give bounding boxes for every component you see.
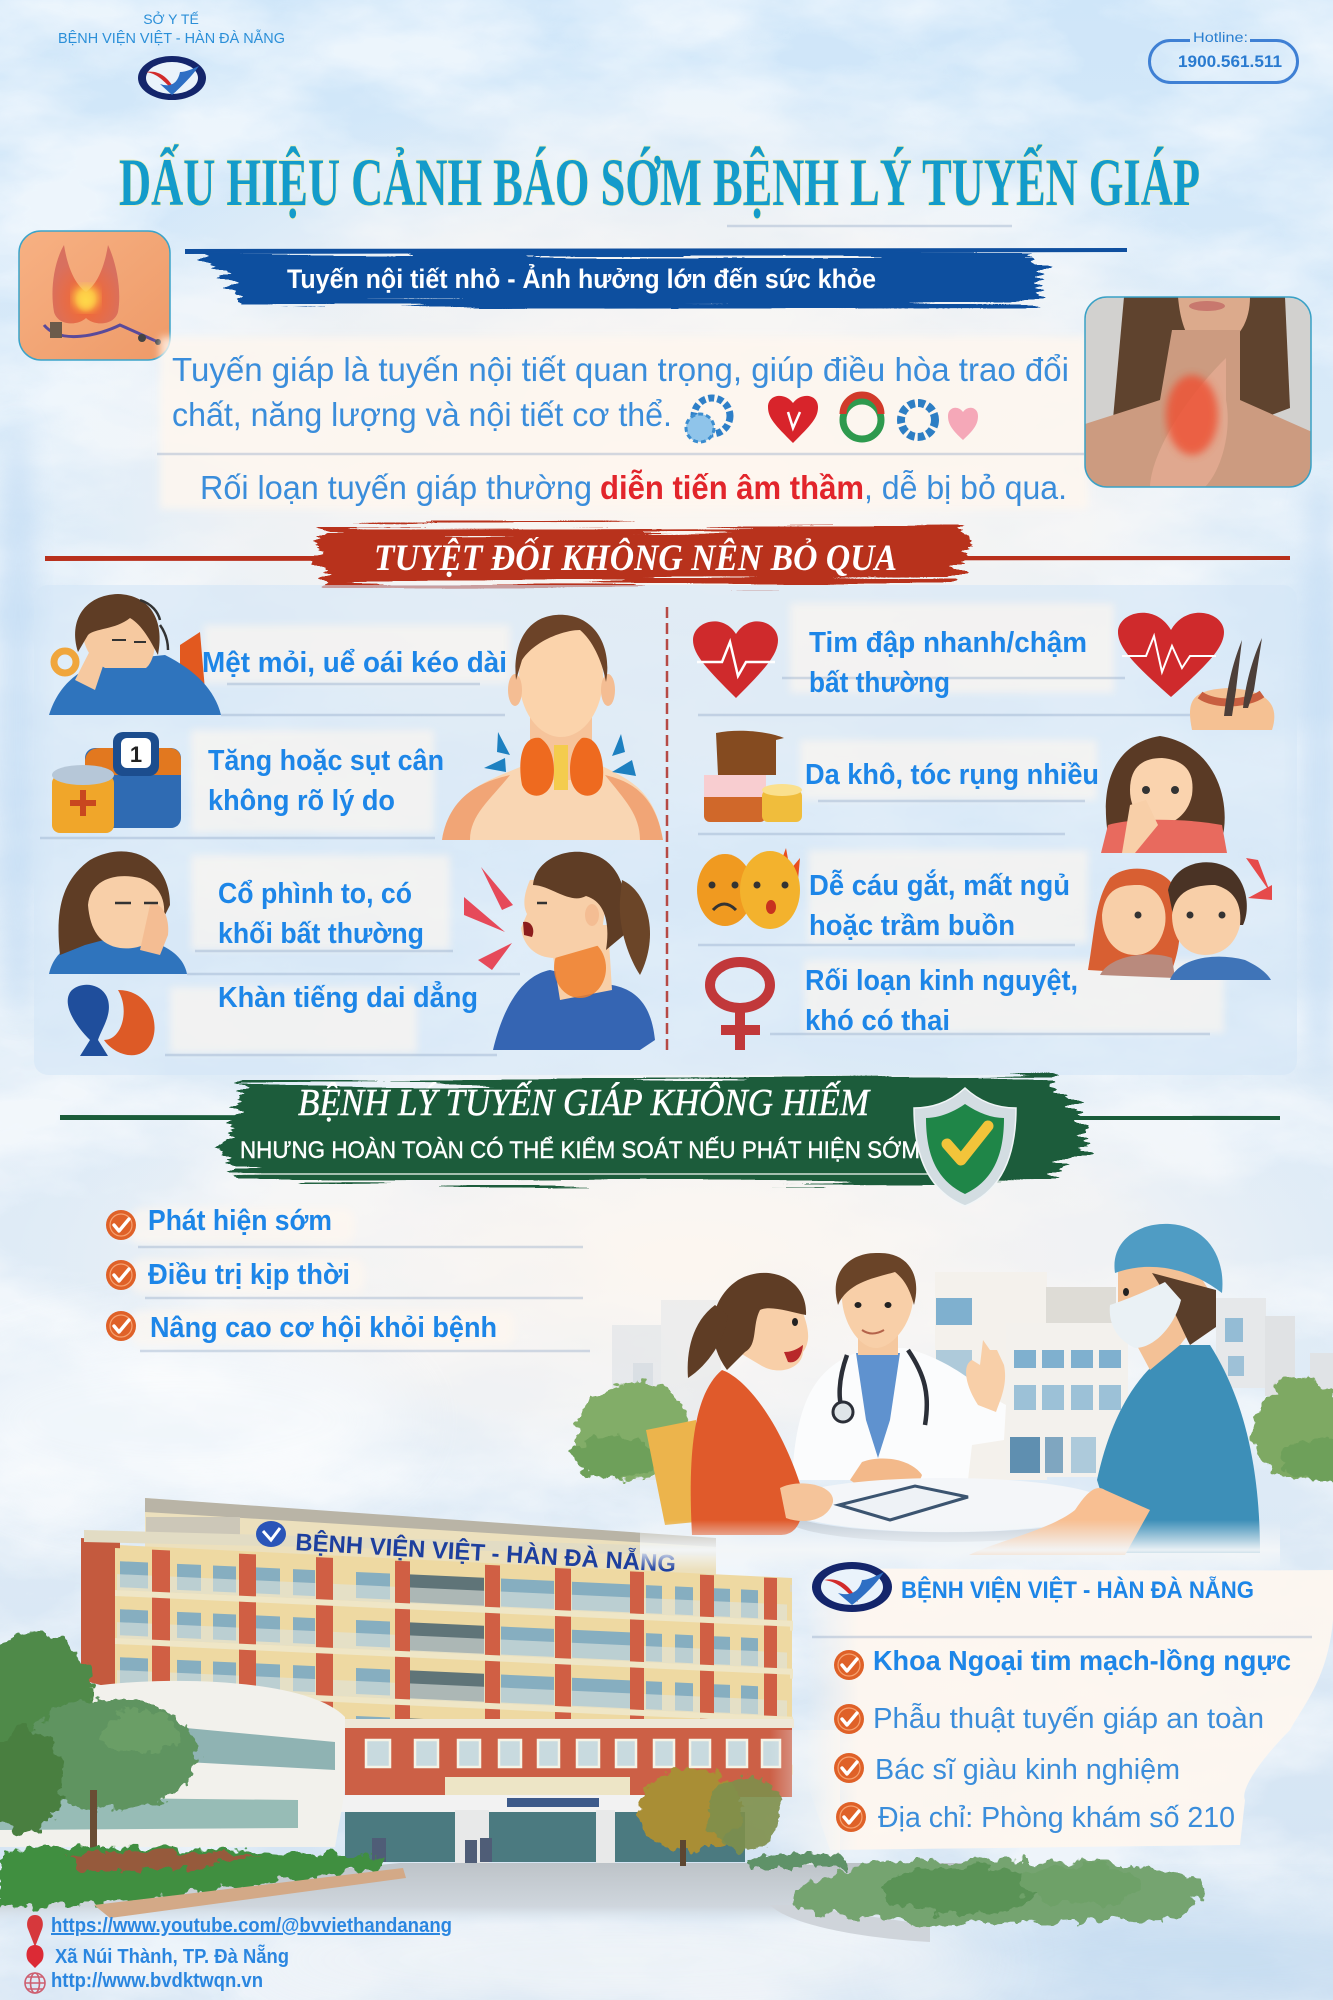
- label: weight change: Tăng hoặc sụt cân: [208, 745, 444, 777]
- illustration: trees, hedge and road: [0, 1633, 1210, 1942]
- label: dry skin and hair loss: Da khô, tóc rụng nhiều: [805, 759, 1099, 791]
- label: menstrual disorder: [805, 965, 1078, 1037]
- illustration: weight scale and jar: 1: [130, 742, 142, 767]
- hotline badge: [1150, 29, 1298, 82]
- panel: hospital info: BỆNH VIỆN VIỆT - HÀN ĐÀ NẴNG: [901, 1576, 1254, 1604]
- panel: warning signs: [34, 585, 1297, 1075]
- label: swollen neck: khối bất thường: [218, 918, 424, 950]
- text: intro paragraph: [172, 351, 1069, 433]
- label: heartbeat: [809, 627, 1087, 699]
- banner: red brush heading: TUYỆT ĐỐI KHÔNG NÊN BỎ QUA: [374, 535, 897, 579]
- header: health department and hospital name: SỞ Y TẾ: [143, 10, 199, 27]
- item: address: Địa chỉ: Phòng khám số 210: [878, 1802, 1235, 1834]
- footer: contact links: http://www.bvdktwqn.vn: [51, 1970, 263, 1992]
- label: menstrual disorder: Rối loạn kinh nguyệt,: [805, 965, 1078, 997]
- list: benefits: [106, 1205, 590, 1351]
- footer: contact links: Xã Núi Thành, TP. Đà Nẵng: [55, 1944, 289, 1968]
- icon: globe: [25, 1973, 45, 1993]
- text: intro paragraph: chất, năng lượng và nội tiết cơ thể.: [172, 396, 672, 433]
- banner: green brush heading: NHƯNG HOÀN TOÀN CÓ THỂ KIỂM SOÁT NẾU PHÁT HIỆN SỚM: [240, 1136, 920, 1164]
- label: fatigue: Mệt mỏi, uể oái kéo dài: [202, 647, 507, 679]
- item: early detection: [106, 1205, 332, 1240]
- illustration: consultation scene: [640, 1224, 1280, 1570]
- icon: larynx: [68, 985, 155, 1056]
- label: hoarseness: Khàn tiếng dai dẳng: [218, 980, 478, 1014]
- banner: blue brush heading: [185, 248, 1127, 308]
- text: silent progression callout: diễn tiến âm thầm: [600, 469, 864, 506]
- icon: heart with pulse: [693, 621, 778, 698]
- photo: woman touching neck: [1085, 297, 1312, 487]
- label: heartbeat: Tim đập nhanh/chậm: [809, 627, 1087, 659]
- illustration: woman with swollen neck: [49, 851, 187, 974]
- label: swollen neck: Cổ phình to, có: [218, 878, 412, 910]
- item: early detection: Phát hiện sớm: [148, 1205, 332, 1237]
- icon: location: [27, 1945, 43, 1968]
- banner: green brush heading: BỆNH LÝ TUYẾN GIÁP KHÔNG HIẾM: [298, 1081, 871, 1124]
- icon: hospital logo small: [812, 1562, 892, 1612]
- banner: blue brush heading: Tuyến nội tiết nhỏ - Ảnh hưởng lớn đến sức khỏe: [287, 262, 876, 294]
- label: weight change: không rõ lý do: [208, 785, 395, 817]
- hotline badge: 1900.561.511: [1178, 52, 1282, 71]
- footer: contact links: https://www.youtube.com/@bvviethandanang: [51, 1915, 452, 1937]
- mist under scene: [640, 1520, 1280, 1570]
- header: health department and hospital name: BỆNH VIỆN VIỆT - HÀN ĐÀ NẴNG: [58, 30, 285, 47]
- label: irritability and insomnia: [809, 868, 1070, 942]
- label: weight change: [208, 745, 444, 817]
- illustration: girl with long hair: [1101, 736, 1227, 853]
- nurse: [969, 1224, 1260, 1555]
- illustration: cosmetics jars: [704, 731, 802, 822]
- illustration: couple: [1088, 858, 1272, 980]
- icon: hospital logo: [138, 56, 206, 100]
- text: silent progression callout: Rối loạn tuyến giáp thường: [200, 469, 592, 506]
- label: irritability and insomnia: hoặc trầm buồn: [809, 910, 1015, 942]
- text: silent progression callout: [200, 469, 1067, 506]
- text: silent progression callout: , dễ bị bỏ qua.: [864, 469, 1067, 506]
- illustration: weight scale and jar: [52, 732, 181, 833]
- icon: pin: [27, 1915, 43, 1947]
- item: department: Khoa Ngoại tim mạch-lồng ngực: [873, 1645, 1291, 1676]
- hotline badge: Hotline:: [1193, 29, 1248, 45]
- icon: female symbol: [710, 962, 770, 1050]
- item: experienced doctors: Bác sĩ giàu kinh nghiệm: [875, 1754, 1180, 1786]
- panel: hospital info: [806, 1562, 1333, 1850]
- illustration: neck with enlarged thyroid: [442, 615, 663, 840]
- label: swollen neck: [218, 878, 424, 950]
- illustration: side profile woman: [464, 852, 655, 1050]
- table and tablet: [780, 1478, 1110, 1542]
- banner: green brush heading: [60, 1077, 1280, 1183]
- text: intro paragraph: Tuyến giáp là tuyến nội tiết quan trọng, giúp điều hòa trao đổi: [172, 351, 1069, 388]
- sign: hospital name: BỆNH VIỆN VIỆT - HÀN ĐÀ NẴNG: [295, 1528, 677, 1578]
- icon: mood faces: [697, 848, 800, 929]
- footer: contact links: [25, 1915, 452, 1993]
- illustration: tired person: [49, 594, 221, 715]
- illustration: hospital building: [0, 1498, 794, 1864]
- panel: cream intro: [157, 337, 1088, 509]
- banner: red brush heading: [45, 527, 1290, 584]
- item: timely treatment: Điều trị kịp thời: [148, 1259, 350, 1291]
- icon: shield check: [914, 1088, 1016, 1206]
- header: health department and hospital name: [58, 10, 285, 47]
- illustration: heart and hair follicle: [1118, 613, 1274, 730]
- patient: [646, 1273, 833, 1535]
- doctor: [792, 1253, 1006, 1492]
- item: better recovery: Nâng cao cơ hội khỏi bệnh: [150, 1312, 497, 1344]
- divider: red dashed: [666, 607, 668, 1052]
- illustration: clinic building background and trees: [573, 1272, 1333, 1482]
- label: heartbeat: bất thường: [809, 667, 950, 699]
- photo: thyroid model: [19, 231, 170, 360]
- item: safe surgery: Phẫu thuật tuyến giáp an toàn: [873, 1702, 1264, 1735]
- icons: metabolism row: [686, 395, 978, 443]
- label: irritability and insomnia: Dễ cáu gắt, mất ngủ: [809, 868, 1070, 902]
- label: menstrual disorder: khó có thai: [805, 1005, 950, 1037]
